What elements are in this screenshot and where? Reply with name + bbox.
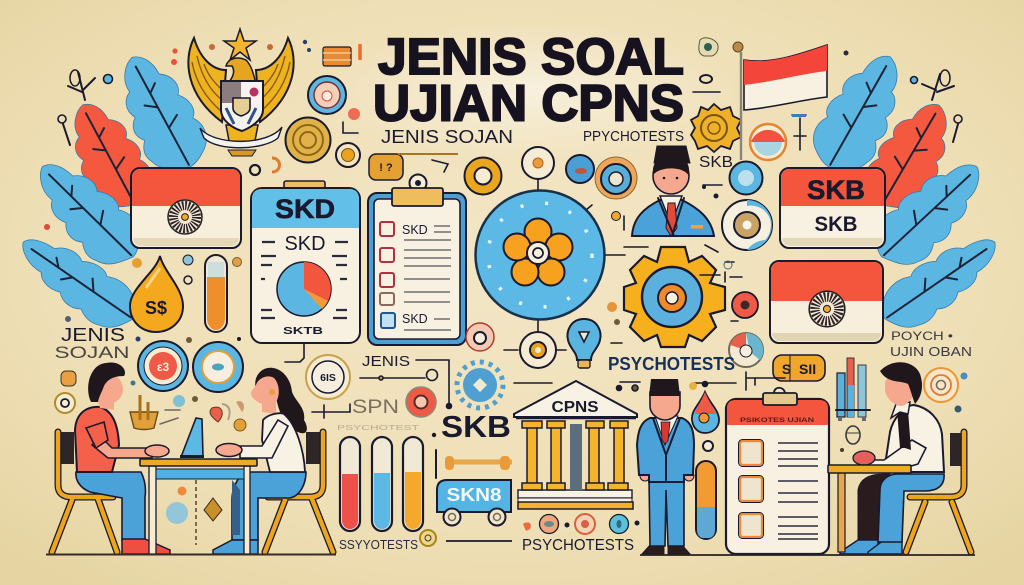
door — [570, 424, 582, 490]
text: blurred SPN: SPN — [352, 397, 399, 418]
face — [251, 376, 279, 414]
head — [885, 373, 914, 406]
text block: right labels: POYCH • — [891, 329, 953, 343]
person: bust with hat — [632, 146, 714, 236]
rear leg — [858, 474, 890, 545]
card body — [251, 188, 360, 343]
hair — [880, 362, 922, 404]
header — [252, 189, 359, 228]
node: bottom center — [520, 332, 556, 368]
arm — [240, 420, 288, 458]
circle badge: S$S: 6IS — [320, 372, 336, 384]
node: blue — [566, 155, 594, 183]
icon: yellow drop: S$ — [145, 298, 167, 318]
pocket — [691, 225, 703, 228]
small swirl — [272, 158, 280, 172]
check boxes — [380, 222, 395, 328]
circle badge: spiral right — [924, 368, 968, 412]
pie chart — [277, 262, 331, 316]
hat — [649, 379, 680, 396]
card: SKB — [780, 168, 885, 248]
shoe — [213, 540, 258, 554]
leaf: blue middle right — [863, 147, 998, 279]
circle badge: red — [732, 292, 758, 318]
node: top center — [522, 147, 554, 179]
bar: orange blue pill — [696, 461, 716, 539]
arm — [92, 436, 152, 458]
leaf: blue top left — [102, 43, 217, 183]
head — [653, 158, 689, 194]
header — [727, 400, 828, 425]
leaf: red right — [856, 90, 968, 222]
label: JENIS SOJAN left: JENIS — [61, 325, 125, 345]
shoes — [642, 545, 664, 555]
decorative small icons: top left — [171, 40, 360, 133]
sleeve — [86, 422, 108, 448]
hand — [853, 451, 875, 465]
chair right — [265, 432, 333, 552]
item label: SKD — [402, 223, 428, 237]
clip — [284, 181, 325, 191]
roof — [514, 381, 637, 417]
shirt — [884, 405, 944, 472]
blue tube — [372, 437, 392, 531]
small ring — [250, 165, 260, 175]
cup — [130, 412, 158, 430]
item label: SKD — [402, 312, 428, 326]
circle badge: gold small — [336, 143, 360, 167]
flag card: right — [770, 261, 883, 343]
sprig: left — [58, 70, 112, 145]
dashes — [261, 242, 348, 318]
icon: bus SKN8: SKN8 — [446, 485, 502, 505]
circle row — [523, 514, 640, 534]
center circle: flower — [476, 190, 604, 320]
title — [373, 28, 684, 132]
shirt — [262, 413, 305, 472]
leaf: blue middle left — [21, 147, 153, 279]
test tube: upper left — [205, 255, 227, 332]
label: PSYCHOTESTS blue: PSYCHOTESTS — [608, 354, 735, 374]
shirt — [655, 416, 678, 445]
node: lower ring — [466, 323, 494, 351]
base — [228, 150, 256, 156]
decorative: orange connector — [432, 433, 512, 478]
pole — [740, 52, 742, 160]
circle badge: dial lower — [729, 333, 763, 367]
circle badge: blue red — [138, 341, 188, 391]
subtitle: left: JENIS SOJAN — [381, 127, 513, 147]
tag: yellow pill — [369, 154, 458, 180]
columns — [522, 421, 628, 490]
clipboard: SKD — [368, 174, 466, 345]
circle badge: red ring — [406, 387, 436, 417]
person left — [75, 362, 170, 554]
orange tube — [403, 437, 423, 531]
ground line — [46, 554, 336, 556]
tie — [897, 410, 911, 450]
table — [140, 459, 257, 554]
wing right — [256, 38, 294, 122]
test tubes — [340, 437, 423, 531]
flag: Indonesia — [733, 42, 827, 160]
subheading: SKB — [814, 213, 858, 236]
laptop — [180, 418, 204, 458]
label: PSYCHOTESTS bottom: PSYCHOTESTS — [522, 537, 634, 554]
legs — [76, 472, 146, 540]
hat — [654, 146, 690, 163]
shoe — [122, 539, 170, 554]
hair — [653, 160, 689, 176]
decorative: faint text: PSYCHOTEST — [337, 425, 420, 432]
circle badge: S$S — [306, 355, 350, 399]
icon: blue burst — [457, 362, 503, 408]
clipboard: checklist — [726, 388, 829, 554]
suit — [637, 418, 694, 482]
icon: big gear — [624, 247, 725, 347]
small ring — [703, 441, 713, 451]
tag: yellow pill: ! ? — [379, 162, 393, 174]
leaf cluster: left — [8, 43, 217, 341]
circle badge: gold rings — [286, 118, 330, 162]
leaf: blue low right — [871, 223, 1010, 341]
label: SKB: SKB — [699, 154, 733, 171]
card: SKD — [251, 181, 360, 362]
star — [224, 29, 256, 60]
lines — [404, 226, 451, 330]
hand — [145, 445, 169, 457]
node: gear circle — [595, 157, 637, 199]
shield — [221, 81, 263, 131]
emblem: garuda — [188, 29, 294, 156]
small dots near tube — [44, 224, 242, 322]
center — [527, 242, 549, 264]
head — [650, 392, 680, 420]
heading: SKD — [275, 194, 335, 224]
header text: PSIKOTES UJIAN — [740, 417, 814, 424]
label: JENIS SOJAN left — [54, 325, 130, 362]
chair left — [52, 432, 117, 552]
under-table icons — [166, 480, 222, 545]
decorative: gear satellites — [607, 261, 742, 343]
title: JENIS SOAL — [378, 28, 684, 85]
hair — [255, 368, 307, 433]
ground line — [640, 554, 975, 556]
tail — [226, 125, 258, 146]
tie — [666, 203, 677, 236]
wing left — [188, 38, 226, 122]
circle badge: blue red: ε3 — [157, 360, 170, 374]
icon: yellow drop — [130, 256, 183, 332]
lines — [778, 443, 818, 539]
tag: yellow pills — [773, 355, 825, 381]
table — [828, 465, 911, 552]
check boxes — [740, 441, 762, 537]
neck and head — [96, 396, 114, 410]
flag card: left — [131, 168, 241, 248]
text block: right labels: UJIN OBAN — [890, 344, 972, 359]
leaf: blue low left — [8, 223, 147, 341]
subheading: SKD — [284, 233, 326, 255]
scene: two people at table — [46, 362, 336, 554]
collar — [891, 402, 910, 418]
sleeve — [862, 440, 926, 469]
circle badge: gold ring — [464, 158, 502, 194]
ear — [269, 389, 275, 395]
label: SSYYOTESTS: SSYYOTESTS — [339, 538, 418, 552]
clip — [392, 174, 443, 206]
label: SKB large: SKB — [441, 409, 511, 444]
circle badge: blue cream — [193, 342, 243, 392]
front leg — [878, 474, 944, 542]
person: standing — [637, 379, 694, 555]
title: UJIAN CPNS — [373, 74, 684, 132]
label: JENIS small: JENIS — [362, 353, 410, 370]
circle badge: red-blue — [750, 124, 786, 160]
eyes — [663, 177, 665, 179]
legs — [649, 478, 684, 546]
chair — [906, 432, 971, 552]
building: CPNS — [514, 381, 637, 509]
heading: SKB — [807, 175, 865, 205]
petals — [504, 218, 572, 286]
icon: gear flower — [691, 104, 741, 152]
scene: seated man right — [640, 362, 975, 555]
label: JENIS SOJAN left: SOJAN — [54, 344, 130, 362]
icon: light bulb — [568, 319, 600, 368]
bar chart: tall bars — [836, 358, 870, 421]
shirt — [75, 407, 119, 472]
tie — [661, 422, 670, 444]
emblem — [809, 291, 845, 327]
hands — [640, 471, 650, 481]
label: CPNS — [552, 399, 599, 416]
circle badge: blue swirl — [730, 162, 762, 194]
hair — [88, 362, 125, 402]
ribbon — [200, 127, 282, 148]
connector: jenis — [312, 360, 452, 418]
clip — [763, 388, 797, 405]
decorative: desk icons — [840, 426, 860, 452]
red tube — [340, 437, 360, 531]
decorative: small left icons — [55, 336, 246, 431]
leaf: blue top right — [803, 42, 920, 183]
shirt — [660, 196, 682, 224]
decorative: connector above building — [514, 372, 785, 391]
icon: drop — [692, 392, 719, 433]
hand — [216, 444, 242, 456]
lapels — [658, 198, 684, 236]
person right — [213, 368, 307, 554]
suit — [632, 200, 714, 236]
leaf: red left — [53, 91, 161, 220]
head — [226, 58, 256, 84]
legs — [232, 472, 306, 540]
decorative: top right small icons — [612, 38, 848, 252]
shoes — [840, 540, 878, 554]
lapels — [653, 418, 680, 480]
circle badge: ring dial — [722, 200, 772, 250]
leaf cluster: right — [803, 42, 1010, 341]
sprig: right — [910, 70, 962, 142]
text block: right labels — [890, 329, 972, 359]
connector lines — [504, 179, 625, 350]
subtitle: right: PPYCHOTESTS — [583, 128, 684, 145]
icon: bus SKN8 — [437, 480, 511, 526]
caption: SKTB — [283, 325, 324, 337]
circle badge: pink — [308, 76, 346, 114]
tag: yellow pills: S SII — [782, 361, 816, 377]
emblem — [168, 200, 202, 234]
circle badge: yellow ring — [420, 530, 512, 546]
tag: orange stripes — [323, 47, 351, 66]
base — [518, 490, 632, 498]
